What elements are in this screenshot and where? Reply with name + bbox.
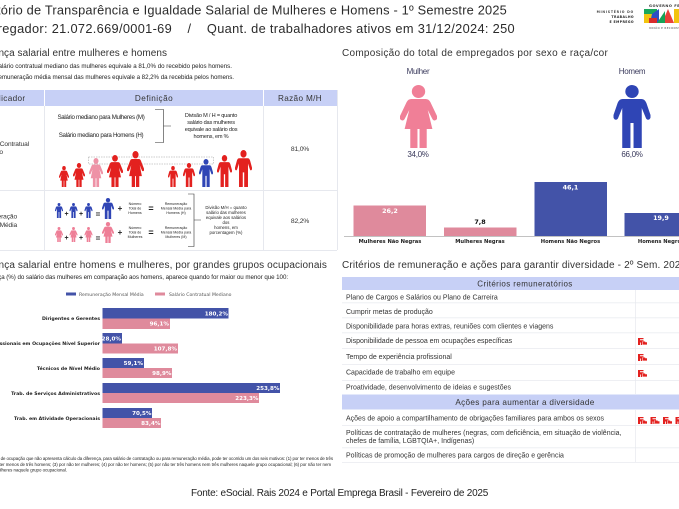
rows: ações: Políticas de promoção de mulheres para cargos de direção e gerência (346, 452, 564, 460)
icons: ações adotadas (638, 417, 679, 424)
row 2 definition: = (148, 204, 154, 214)
row 1 definition: salário das mulheres (187, 120, 235, 126)
rows: ações: chefes de família, LGBTQIA+, Indígenas) (346, 438, 474, 445)
row 2 definition: Remuneração (165, 226, 187, 230)
bar chart: grupos ocupacionais: 223,3% (235, 396, 259, 402)
label: mulher: Mulher (407, 67, 430, 76)
row 2 definition: Divisão M/H = quanto (205, 205, 247, 210)
bar chart: grupos ocupacionais: 96,1% (150, 322, 169, 328)
row 1 definition (57, 110, 252, 187)
rows: critérios (346, 294, 554, 392)
row 2 definition: porcentagem (%) (210, 230, 243, 235)
bar chart: grupos ocupacionais: Técnicos de Nível Médio (37, 365, 101, 372)
value: homem: 66,0% (621, 150, 643, 159)
pictogram: mulheres (59, 151, 144, 187)
bar chart: grupos ocupacionais: 180,2% (205, 312, 228, 318)
value: mulher: 34,0% (407, 150, 429, 159)
row 1 definition: Divisão M / H = quanto (185, 113, 237, 119)
row 2 definition: Remuneração (165, 202, 187, 206)
row 2 definition: Homens (H) (166, 211, 186, 215)
legend: Remuneração Mensal Média (79, 291, 144, 298)
legend: Salário Contratual Mediano (169, 291, 232, 298)
heading: composição: Composição do total de empregados por sexo e raça/cor (342, 48, 609, 59)
bar chart: grupos ocupacionais: 98,9% (152, 371, 172, 377)
bar chart: sexo e raça: 7,8 (474, 218, 486, 226)
row 2 definition: Mensal Média para (161, 206, 191, 210)
table header: critérios remuneratórios: Critérios remuneratórios (477, 280, 573, 288)
label: homem: Homem (619, 67, 646, 76)
bar chart: grupos ocupacionais (0, 308, 280, 428)
table header: Razão M/H (278, 94, 322, 103)
bar chart: sexo e raça: 26,2 (382, 207, 398, 215)
row 2 definition: Número (129, 226, 141, 230)
fonte: Fonte: eSocial. Rais 2024 e Portal Emprega Brasil - Fevereiro de 2025 (191, 488, 489, 499)
bar chart: grupos ocupacionais: 70,5% (132, 411, 152, 417)
table: indicadores (0, 90, 338, 251)
row 2 definition: Mulheres (128, 235, 143, 239)
rows: critérios: Plano de Cargos e Salários ou Plano de Carreira (346, 294, 498, 302)
row 2 definition: = (96, 210, 101, 219)
bar chart: grupos ocupacionais: Dirigentes e Gerentes (42, 316, 100, 322)
row 2 value: 82,2% (291, 218, 309, 225)
bar chart: grupos ocupacionais: 59,1% (124, 361, 143, 367)
row 2 definition: Total de (129, 206, 141, 210)
row 2 definition: + (79, 235, 83, 242)
bar chart: sexo e raça: 46,1 (563, 184, 578, 192)
bar chart: sexo e raça: Mulheres Não Negras (359, 239, 421, 245)
row 2 definition: salário das mulheres (206, 210, 246, 215)
row 2 definition: + (64, 235, 69, 242)
row 2 definition: equivale aos salários (206, 215, 246, 220)
panel: composição (342, 48, 679, 245)
row 2 definition: + (118, 204, 123, 213)
rows: critérios: Capacidade de trabalho em equipe (346, 370, 455, 376)
heading: critérios: Critérios de remuneração e ações para garantir diversidade - 2º Sem. 2024 (342, 260, 679, 271)
row 2 definition: dos (223, 220, 229, 225)
panel: diferença salarial (0, 48, 234, 81)
row 1 definition: equivale ao salário dos (185, 127, 238, 133)
icons: critérios adotados (638, 338, 647, 377)
panel: critérios de remuneração (342, 260, 679, 463)
icon: homem (613, 85, 651, 148)
row 1 value: 81,0% (291, 146, 309, 153)
bar chart: grupos ocupacionais: 253,8% (256, 386, 280, 392)
logo: ministério do trabalho e emprego (597, 9, 634, 24)
rows: critérios: Proatividade, desenvolvimento de ideias e sugestões (346, 384, 511, 392)
bar chart: sexo e raça (344, 182, 679, 245)
rows: ações: Ações de apoio a compartilhamento de obrigações familiares para ambos os sexos (346, 416, 604, 422)
row 2 definition: + (64, 211, 69, 218)
icon: mulher (400, 85, 437, 148)
rows: critérios: Disponibilidade de pessoa em ocupações específicas (346, 338, 513, 345)
rows: critérios: Disponibilidade para horas extras, reuniões com clientes e viagens (346, 324, 554, 330)
rows: critérios: Cumprir metas de produção (346, 309, 433, 316)
rows: critérios: Tempo de experiência profissional (346, 354, 452, 361)
pictogram: mulheres soma (55, 222, 114, 243)
table header: critérios remuneratórios (342, 277, 679, 290)
rows: ações: Políticas de contratação de mulheres (negras, com deficiência, em situação de violência, (346, 430, 622, 437)
pictogram: homens soma (55, 198, 114, 219)
table header: ações (342, 394, 679, 410)
row 2 definition: Homens (128, 211, 142, 215)
table header (0, 90, 337, 106)
footnote (0, 456, 334, 472)
logo: ministério do trabalho e emprego: TRABALHO (611, 15, 634, 19)
row 2 definition (55, 194, 247, 246)
bar chart: grupos ocupacionais: 28,0% (102, 336, 121, 342)
row 2 definition: Mulheres (M) (165, 235, 187, 239)
logo: governo federal brasil (644, 4, 679, 30)
bar chart: grupos ocupacionais: Trab. em Atividade Operacionais (14, 416, 100, 422)
bar chart: sexo e raça: Homens Não Negros (541, 239, 600, 245)
bar chart: sexo e raça: 19,9 (653, 214, 669, 222)
row 2 definition: homens, em (214, 225, 238, 230)
bar chart: grupos ocupacionais: Trab. de Serviços Administrativos (11, 391, 100, 397)
pictogram: homens (168, 150, 252, 187)
logo: ministério do trabalho e emprego: E EMPREGO (609, 20, 634, 24)
bar chart: grupos ocupacionais: 107,8% (154, 346, 177, 352)
row 2 definition: Total de (129, 230, 141, 234)
logo: ministério do trabalho e emprego: MINISTÉRIO DO (597, 9, 634, 14)
row 2 definition: = (96, 234, 101, 243)
row 2 definition: + (79, 211, 83, 218)
row 2 definition: = (148, 228, 154, 238)
row 1 definition: Salário mediano para Homens (H) (59, 132, 144, 139)
row 1 definition: Salário mediano para Mulheres (M) (57, 114, 145, 121)
row 2 definition: Número (129, 202, 141, 206)
title (0, 2, 515, 36)
row 2 definition: Mensal Média para (161, 230, 191, 234)
table header: Definição (135, 94, 173, 103)
row 1 definition: homens, em % (194, 134, 229, 140)
bar chart: sexo e raça: Mulheres Negras (455, 239, 505, 245)
panel: diferença por grupos ocupacionais (0, 260, 334, 472)
bar chart: grupos ocupacionais: 83,4% (141, 421, 161, 427)
table header: ações: Ações para aumentar a diversidade (455, 398, 595, 407)
rows: ações (346, 416, 622, 460)
row 2 definition: + (118, 228, 123, 237)
legend (66, 291, 232, 298)
